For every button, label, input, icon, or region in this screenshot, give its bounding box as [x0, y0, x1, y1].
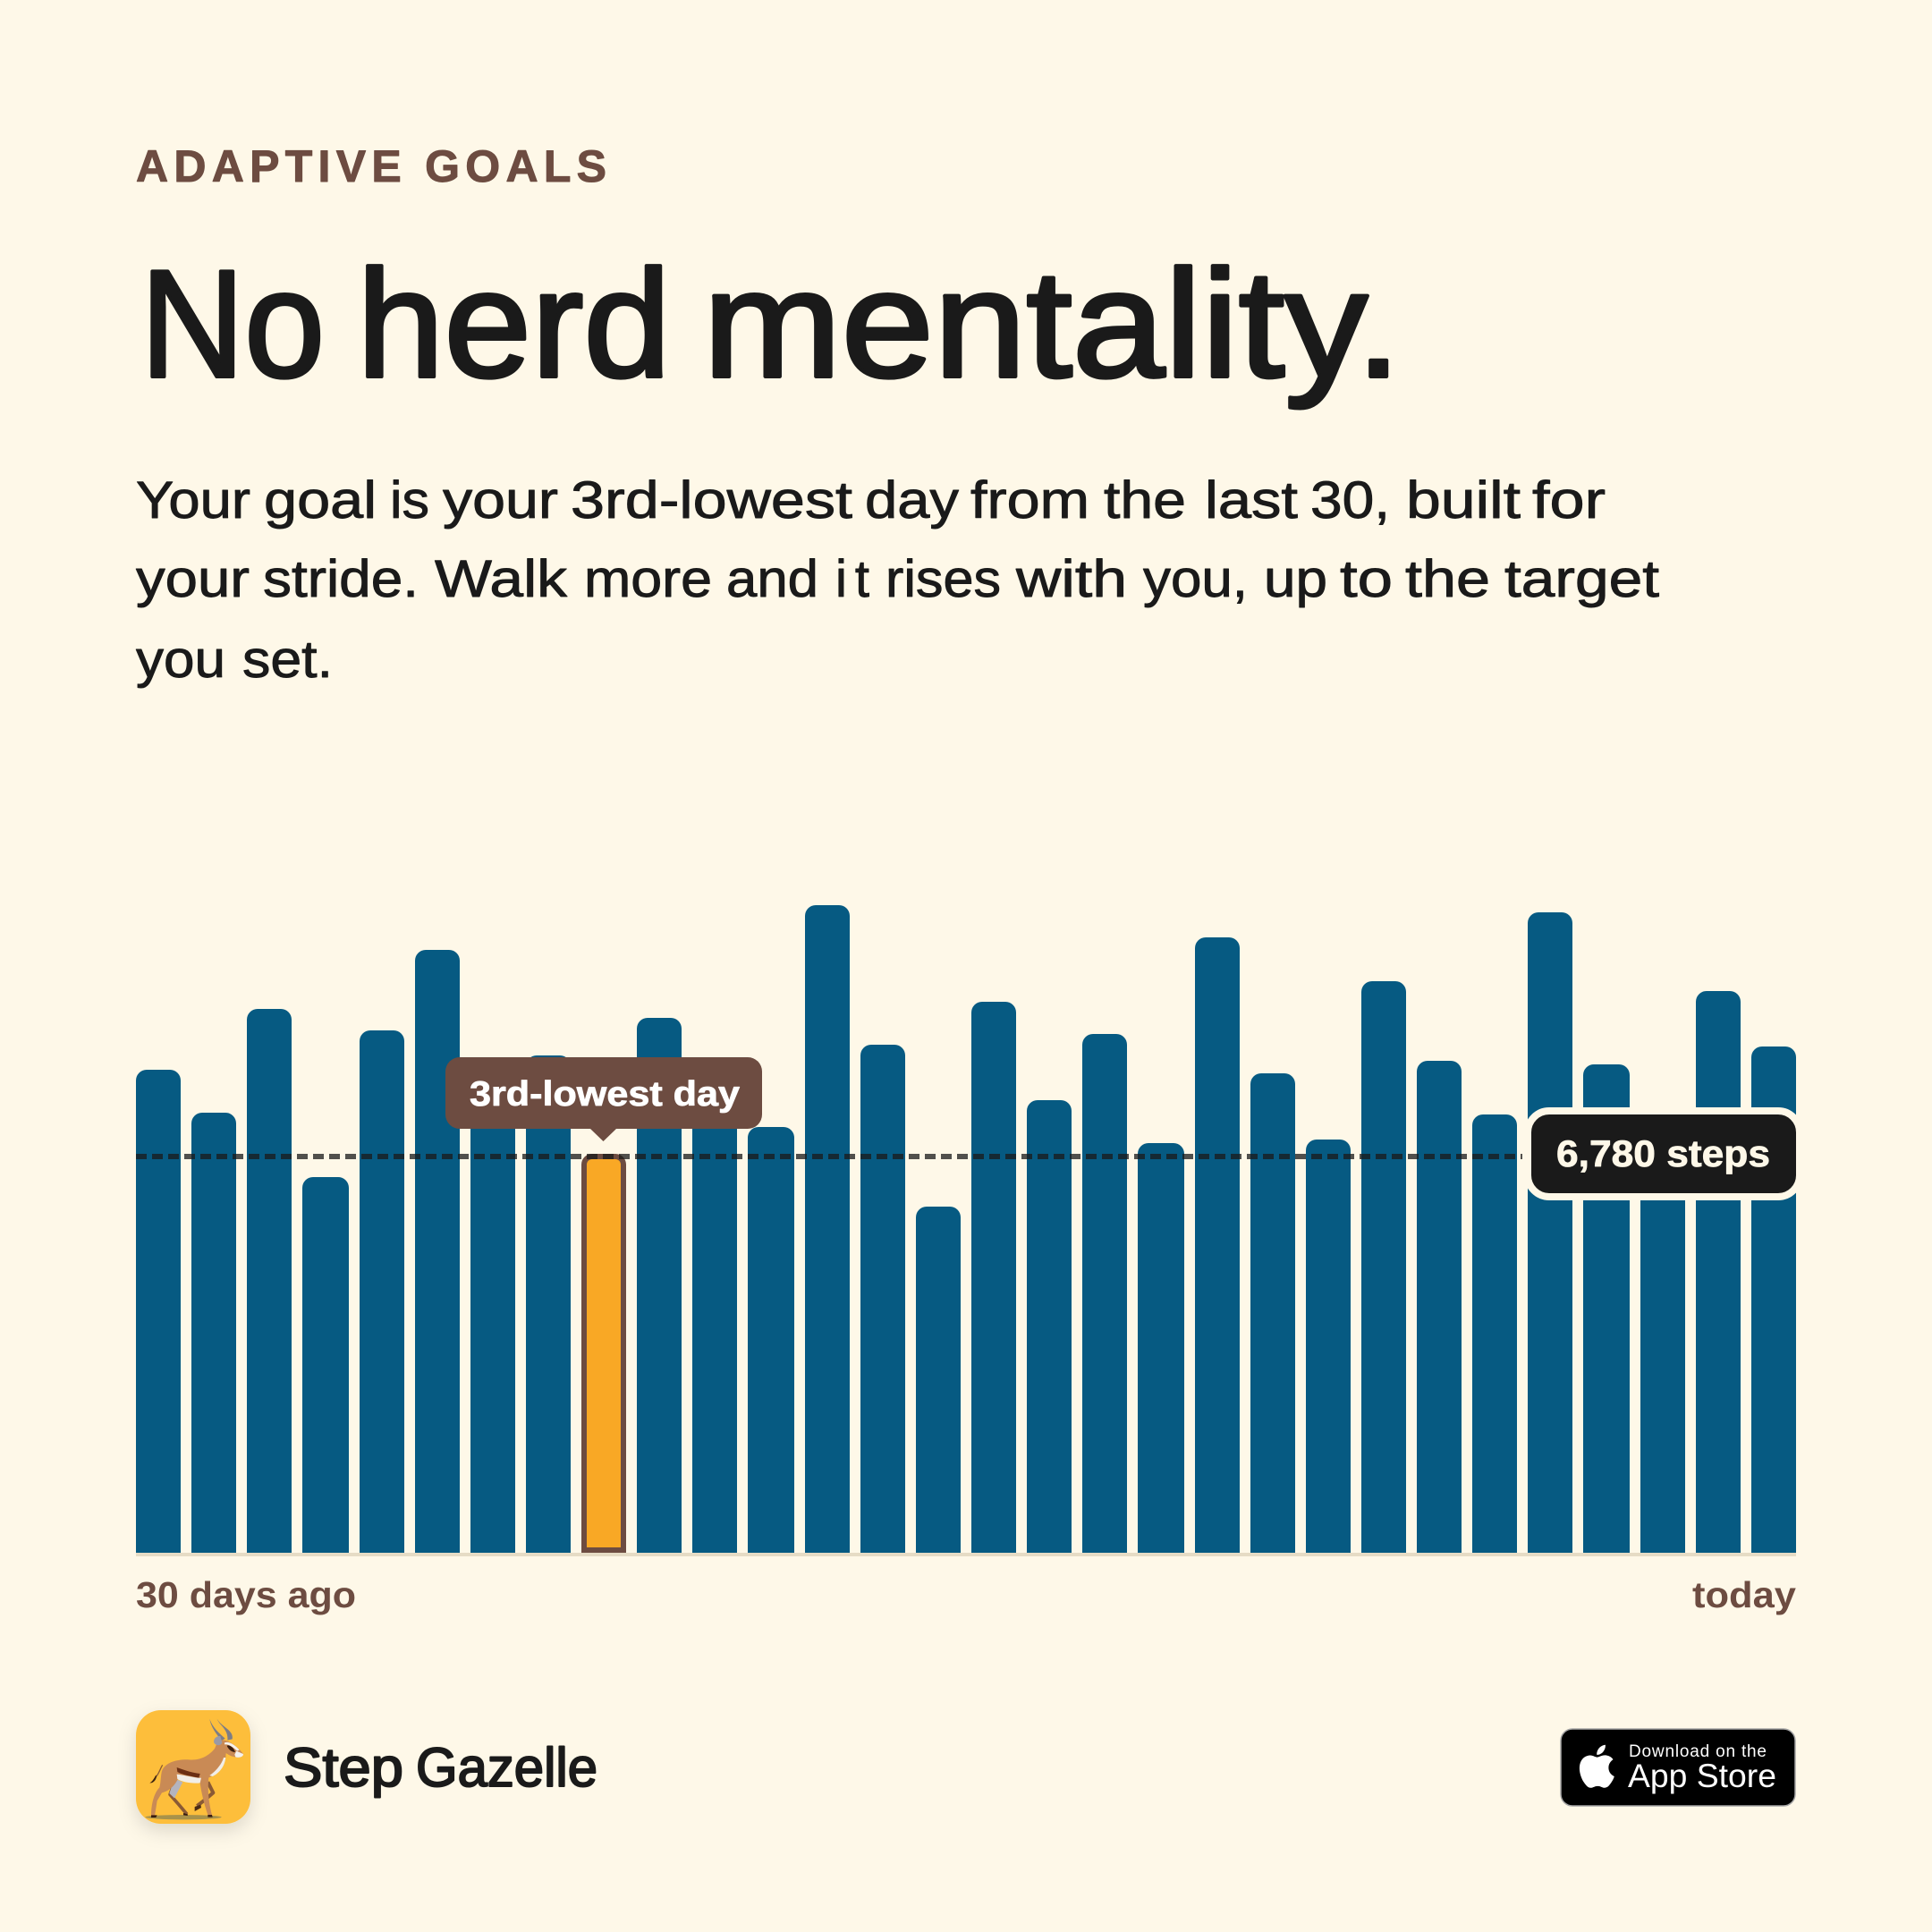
value label: 6,780 steps — [1528, 1111, 1800, 1197]
tooltip: 3rd-lowest day: 3rd-lowest day — [470, 1075, 740, 1114]
body paragraph: it — [835, 550, 869, 608]
tooltip: 3rd-lowest day — [445, 1057, 762, 1141]
title: mentality. — [703, 239, 1402, 410]
axis label: today: today — [1692, 1574, 1796, 1615]
body paragraph: up — [1264, 550, 1327, 608]
daily step bars — [136, 905, 1796, 1574]
body paragraph: your — [136, 550, 250, 608]
body paragraph: rises — [886, 550, 1001, 608]
app name: Step Gazelle: Step — [284, 1737, 403, 1798]
highlighted 3rd-lowest bar — [581, 1154, 626, 1553]
bar chart: last 30 days of steps — [136, 905, 1800, 1615]
title: herd — [357, 239, 671, 410]
body paragraph: Walk — [435, 550, 568, 608]
eyebrow: adaptive goals: ADAPTIVE GOALS — [136, 141, 606, 191]
body paragraph: is — [390, 471, 429, 530]
body paragraph: 3rd-lowest — [571, 471, 852, 530]
app store badge: Download on the — [1629, 1742, 1767, 1761]
value label: 6,780 steps: 6,780 steps — [1556, 1132, 1770, 1174]
body paragraph: last — [1205, 471, 1298, 530]
body paragraph: the — [1104, 471, 1186, 530]
body paragraph: from — [970, 471, 1089, 530]
body paragraph: for — [1532, 471, 1606, 530]
body paragraph: more — [584, 550, 712, 608]
body paragraph: built — [1406, 471, 1521, 530]
body paragraph: you, — [1143, 550, 1248, 608]
app store badge — [1561, 1729, 1795, 1806]
body paragraph: you — [136, 631, 225, 689]
app icon: gazelle — [136, 1710, 250, 1824]
body paragraph: and — [726, 550, 818, 608]
body paragraph: target — [1504, 550, 1659, 608]
app store badge: App Store — [1628, 1758, 1776, 1794]
body paragraph: the — [1405, 550, 1490, 608]
body paragraph: set. — [242, 631, 333, 689]
title: No — [140, 239, 325, 410]
body paragraph: goal — [264, 471, 377, 530]
body paragraph: 30, — [1310, 471, 1390, 530]
body paragraph: to — [1340, 550, 1393, 608]
body paragraph — [136, 471, 1659, 689]
axis label: 30 days ago: 30 days ago — [136, 1574, 356, 1615]
app name: Step Gazelle: Gazelle — [416, 1737, 597, 1798]
body paragraph: stride. — [263, 550, 419, 608]
body paragraph: your — [443, 471, 558, 530]
body paragraph: day — [865, 471, 959, 530]
body paragraph: with — [1015, 550, 1127, 608]
body paragraph: Your — [136, 471, 250, 530]
